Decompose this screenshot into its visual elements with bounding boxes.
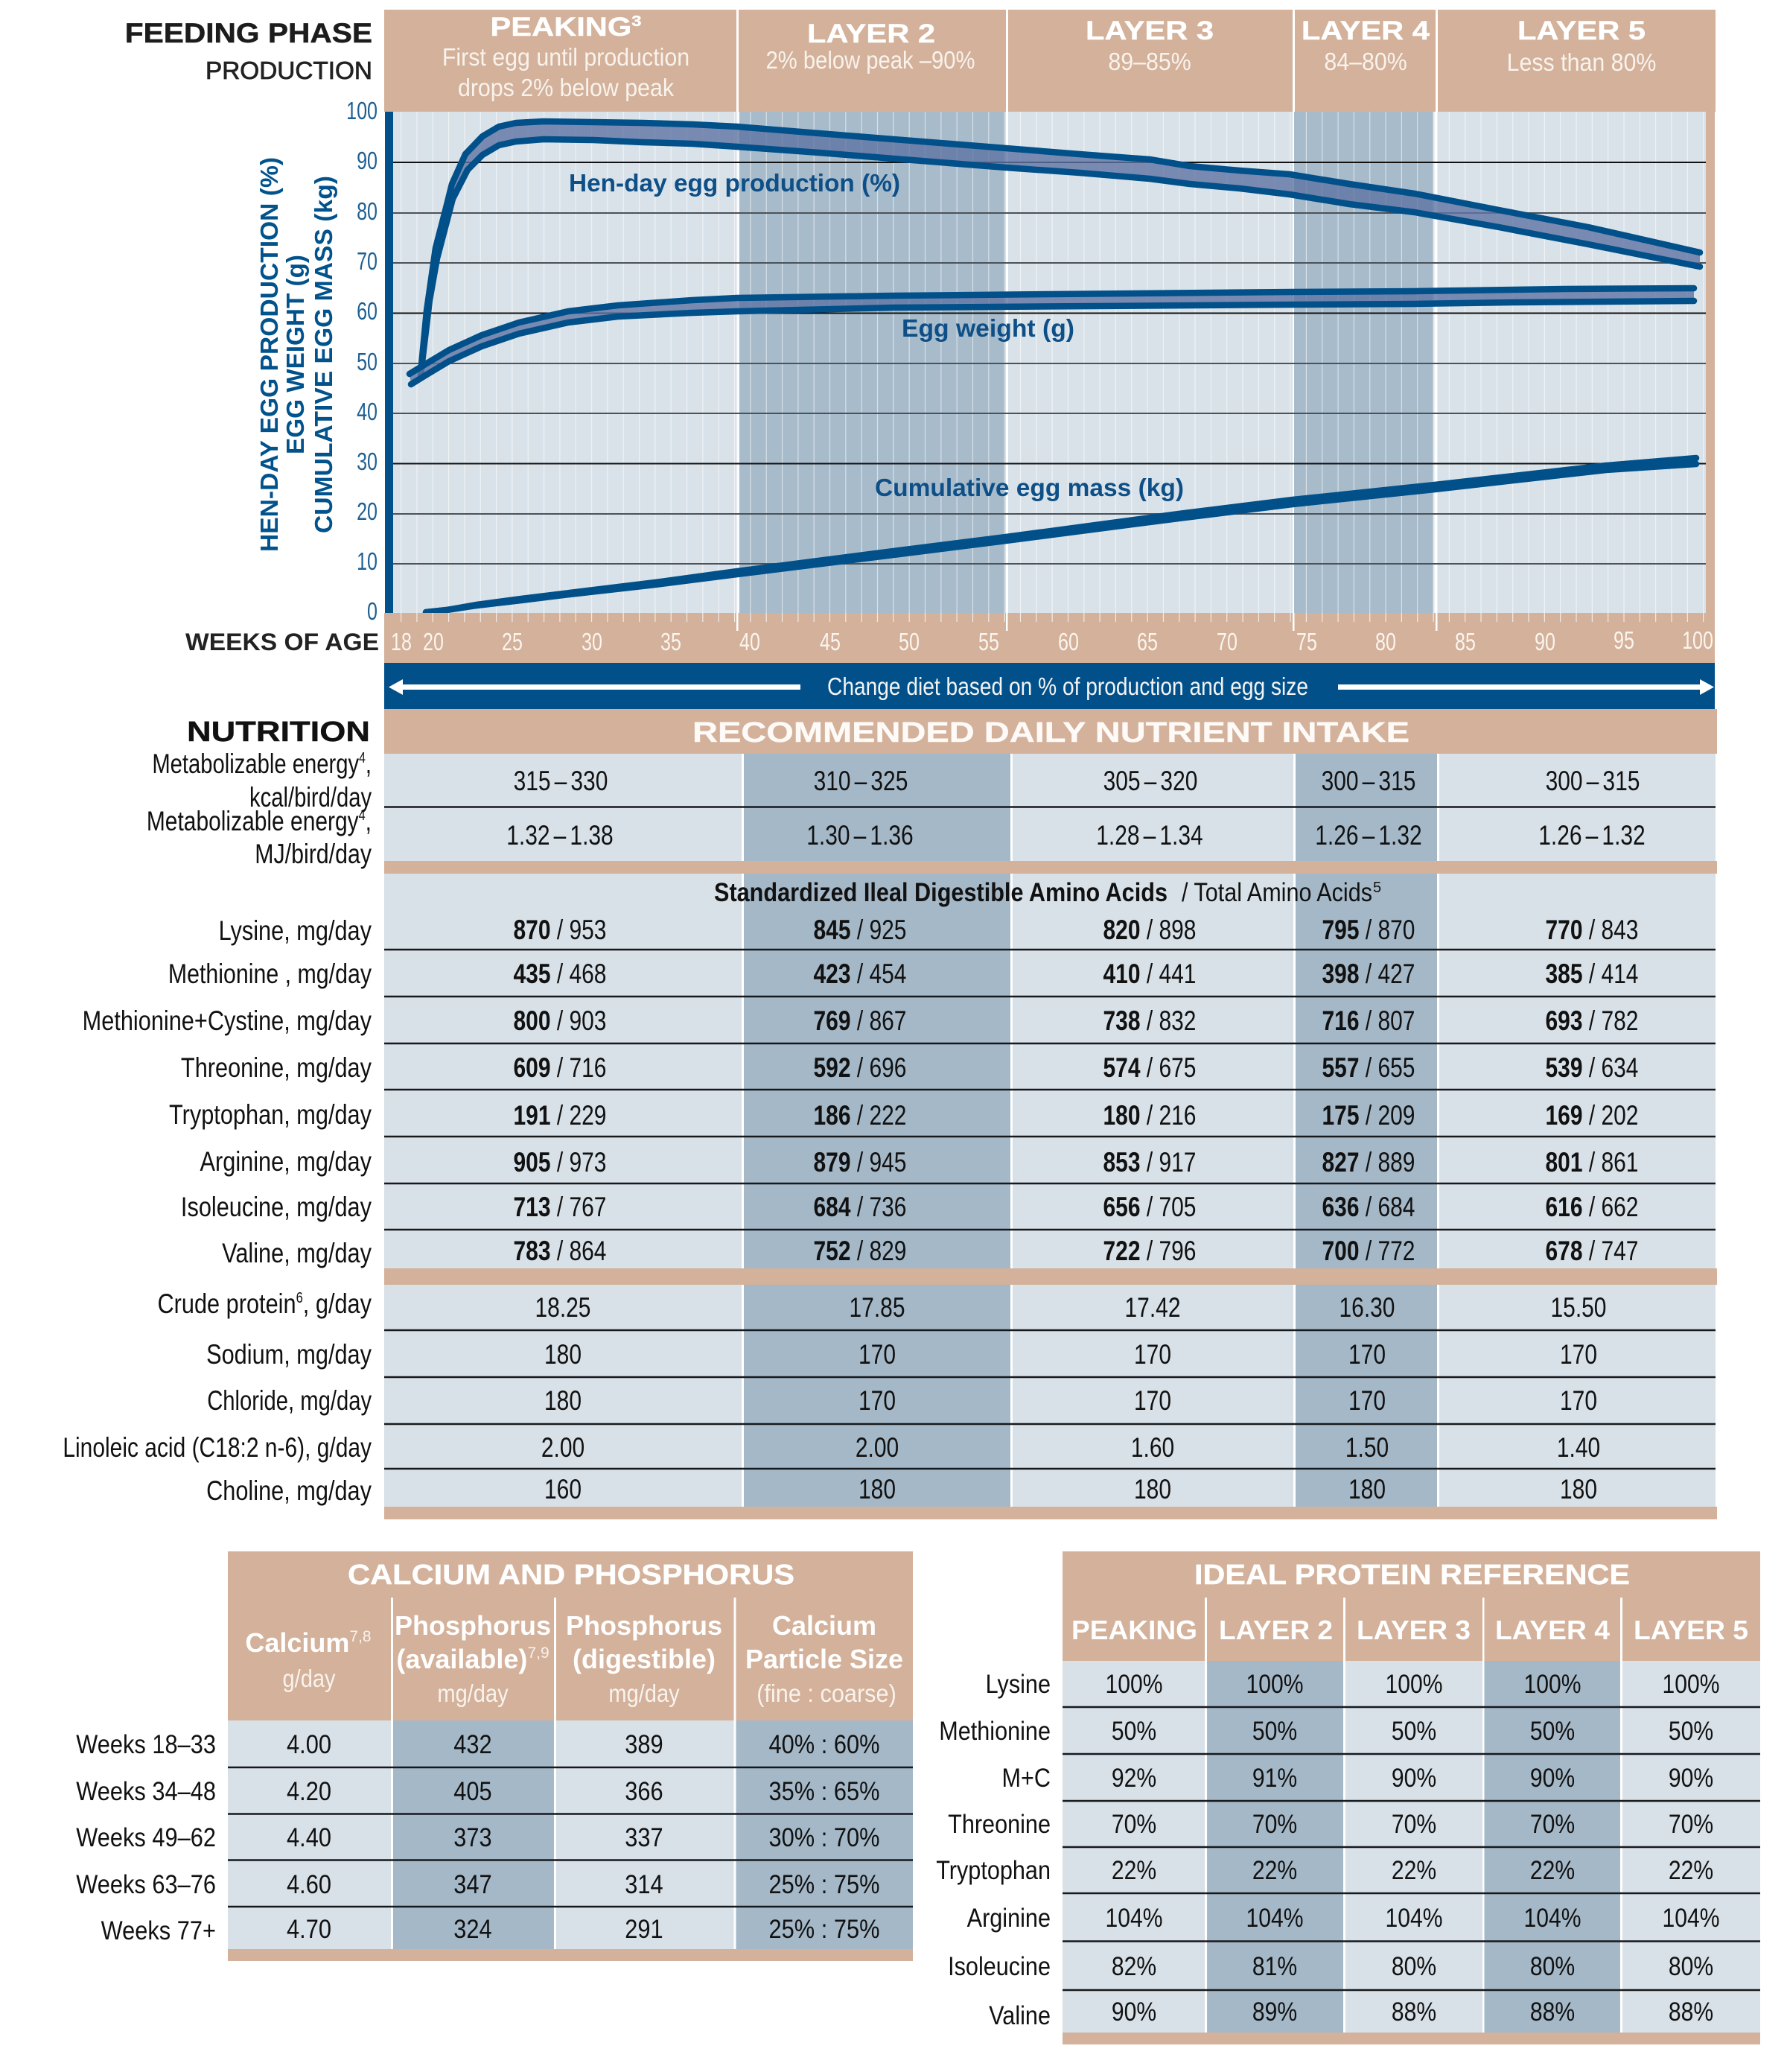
row: valine: 88% [1392, 1997, 1436, 2027]
y axis tick labels: 10 [357, 548, 378, 576]
row: weeks 77+: 25% : 75% [769, 1914, 879, 1943]
phase: peaking: PEAKING [491, 13, 631, 42]
x axis: weeks of age: 85 [1455, 629, 1476, 656]
row: linoleic acid: 1.40 [1557, 1433, 1600, 1464]
row: crude protein: , g/day [303, 1288, 372, 1320]
row: sodium: 180 [544, 1340, 582, 1370]
row: metabolizable energy kcal: Metabolizable energy [152, 749, 359, 780]
title: ideal protein reference: IDEAL PROTEIN REFERENCE [1194, 1560, 1630, 1591]
curve: hen-day egg production [421, 121, 1700, 375]
phase: layer 3: 89–85% [1108, 48, 1191, 75]
y axis titles: EGG WEIGHT (g) [281, 255, 309, 454]
row: linoleic acid: 1.50 [1345, 1433, 1389, 1464]
row: threonine: 609 / 716 [514, 1053, 606, 1084]
row: methionine+cystine: 800 / 903 [514, 1006, 606, 1037]
column header: calcium particle size: Calcium [772, 1610, 876, 1641]
row: choline: 160 [544, 1475, 582, 1505]
x axis: weeks of age: 60 [1058, 629, 1079, 656]
row: lysine: 100% [1663, 1669, 1719, 1699]
row: linoleic acid: 1.60 [1131, 1433, 1174, 1464]
phase: layer 5: Less than 80% [1507, 48, 1656, 76]
row: valine: 88% [1669, 1997, 1713, 2027]
row: linoleic acid: Linoleic acid (C18:2 n-6), g/day [63, 1433, 372, 1464]
row: arginine [967, 1903, 1719, 1933]
row: methionine: 410 / 441 [1103, 959, 1196, 990]
column header: phosphorus digestible: mg/day [608, 1679, 680, 1707]
row: lysine: Lysine [986, 1669, 1051, 1698]
row: threonine: 557 / 655 [1322, 1053, 1415, 1084]
row: weeks 49-62: 30% : 70% [769, 1822, 879, 1852]
x axis: weeks of age: 50 [899, 629, 920, 656]
row: valine: 88% [1530, 1997, 1575, 2027]
row: arginine: 905 / 973 [514, 1148, 606, 1178]
row: weeks 34-48: 405 [453, 1776, 492, 1805]
row: tryptophan [169, 1099, 1638, 1131]
row: tryptophan: 180 / 216 [1103, 1101, 1196, 1131]
banner: change diet: Change diet based on % of production and egg size [827, 673, 1308, 700]
row: arginine: 104% [1663, 1903, 1719, 1933]
phase: peaking: 3 [631, 13, 641, 30]
row: choline: 180 [1134, 1475, 1171, 1505]
row: valine: Valine, mg/day [222, 1238, 372, 1269]
row: metabolizable energy MJ: 1.26 – 1.32 [1315, 821, 1422, 851]
row: metabolizable energy kcal [152, 749, 1640, 813]
row: weeks 63-76: 347 [453, 1869, 492, 1898]
x axis: weeks of age: 95 [1614, 627, 1634, 655]
row: lysine [986, 1669, 1719, 1699]
panel: feeding phase header [384, 10, 1716, 112]
row: valine: 700 / 772 [1322, 1236, 1415, 1267]
row: isoleucine: 81% [1252, 1951, 1297, 1981]
row: methionine: 50% [1530, 1716, 1575, 1746]
y axis tick labels: 100 [346, 98, 378, 125]
row: threonine: 574 / 675 [1103, 1053, 1196, 1084]
row: chloride: 170 [1348, 1386, 1386, 1417]
heading: nutrition: NUTRITION [187, 716, 370, 748]
row: metabolizable energy MJ: , [366, 807, 372, 837]
phase: layer 2: LAYER 2 [807, 19, 935, 48]
row: metabolizable energy kcal: 300 – 315 [1322, 766, 1415, 797]
row: weeks 63-76: 4.60 [287, 1869, 331, 1898]
phase: layer 5 [1507, 16, 1656, 76]
column headers: LAYER 4 [1495, 1615, 1610, 1645]
row: M+C: 91% [1252, 1763, 1297, 1793]
row: linoleic acid: 2.00 [541, 1433, 584, 1464]
row: threonine: 592 / 696 [814, 1053, 906, 1084]
row: weeks 63-76: 314 [625, 1869, 663, 1898]
row: methionine: 435 / 468 [514, 959, 606, 990]
row: lysine: 820 / 898 [1103, 915, 1196, 946]
row: threonine: 70% [1392, 1809, 1436, 1839]
column header: calcium: g/day [283, 1665, 336, 1692]
row: threonine: 70% [1530, 1809, 1575, 1839]
row: crude protein: 17.85 [850, 1293, 905, 1323]
x axis: weeks of age: 40 [739, 629, 760, 656]
row: methionine: 423 / 454 [814, 959, 906, 990]
row: valine [222, 1236, 1638, 1269]
row: arginine: 853 / 917 [1103, 1148, 1196, 1178]
row: crude protein: 18.25 [535, 1293, 590, 1323]
column headers: LAYER 2 [1219, 1615, 1333, 1645]
row: M+C: 90% [1530, 1763, 1575, 1793]
row: valine: 722 / 796 [1103, 1236, 1196, 1267]
row: weeks 77+ [101, 1914, 879, 1945]
row: weeks 49-62 [76, 1822, 879, 1852]
row: crude protein: 6 [296, 1289, 303, 1306]
row: weeks 49-62: 373 [453, 1822, 492, 1852]
row: crude protein: 17.42 [1125, 1293, 1180, 1323]
panel: ideal protein reference [936, 1551, 1760, 2044]
y axis titles: CUMULATIVE EGG MASS (kg) [310, 176, 337, 533]
row: choline: 180 [1348, 1475, 1386, 1505]
column headers: LAYER 5 [1634, 1615, 1748, 1645]
y axis titles [255, 157, 337, 552]
row: tryptophan: 22% [1252, 1855, 1297, 1885]
phase: layer 2: 2% below peak –90% [766, 46, 975, 74]
row: threonine: 70% [1112, 1809, 1156, 1839]
row: weeks 18-33 [76, 1729, 879, 1758]
y axis tick labels: 20 [357, 498, 378, 526]
row: isoleucine: 684 / 736 [814, 1192, 906, 1223]
column header: phosphorus available [395, 1610, 551, 1707]
x axis: weeks of age: 35 [660, 629, 681, 656]
row: isoleucine: Isoleucine [948, 1951, 1051, 1980]
row: sodium: 170 [1560, 1340, 1597, 1370]
x axis: weeks of age [384, 613, 1715, 663]
row: threonine: Threonine, mg/day [181, 1052, 372, 1084]
row: weeks 77+: Weeks 77+ [101, 1916, 216, 1945]
row: lysine: 100% [1106, 1669, 1162, 1699]
y axis tick labels: 0 [367, 598, 378, 626]
x axis: weeks of age: 100 [1682, 627, 1713, 655]
x axis: weeks of age: 75 [1296, 629, 1317, 656]
row: weeks 34-48: 4.20 [287, 1776, 331, 1805]
row: weeks 18-33: 389 [625, 1729, 663, 1758]
row: tryptophan: 22% [1530, 1855, 1575, 1885]
x axis: weeks of age: 45 [820, 629, 841, 656]
row: weeks 18-33: 4.00 [287, 1729, 331, 1758]
row: sodium: 170 [859, 1340, 896, 1370]
row: methionine: Methionine [939, 1716, 1051, 1745]
row: isoleucine: 616 / 662 [1546, 1192, 1638, 1223]
row: tryptophan: 22% [1112, 1855, 1156, 1885]
row: weeks 77+: 291 [625, 1914, 663, 1943]
row: sodium [206, 1339, 1597, 1370]
heading: weeks of age: WEEKS OF AGE [185, 629, 379, 655]
row: weeks 49-62: Weeks 49–62 [76, 1822, 216, 1852]
row: lysine: 100% [1386, 1669, 1442, 1699]
row: isoleucine: 80% [1530, 1951, 1575, 1981]
x axis: weeks of age: 70 [1217, 629, 1237, 656]
row: chloride: 170 [859, 1386, 896, 1417]
column header: calcium: 7,8 [349, 1628, 372, 1645]
row: lysine: 770 / 843 [1546, 915, 1638, 946]
x axis: weeks of age: 30 [582, 629, 602, 656]
phase: layer 3 [1086, 16, 1214, 75]
row: tryptophan: 175 / 209 [1322, 1101, 1415, 1131]
row: threonine [181, 1052, 1638, 1084]
row: weeks 77+: 324 [453, 1914, 492, 1943]
row: metabolizable energy MJ: 1.32 – 1.38 [506, 821, 614, 851]
y axis tick labels: 40 [357, 398, 378, 426]
row: arginine: Arginine, mg/day [200, 1146, 372, 1178]
row: weeks 49-62: 337 [625, 1822, 663, 1852]
y axis tick labels: 80 [357, 198, 378, 226]
row: metabolizable energy MJ: 1.28 – 1.34 [1096, 821, 1203, 851]
column header: phosphorus digestible [566, 1610, 722, 1707]
row: metabolizable energy kcal: kcal/bird/day [249, 783, 372, 813]
row: metabolizable energy kcal: 4 [359, 749, 366, 766]
row: metabolizable energy kcal: 310 – 325 [814, 766, 908, 797]
row: M+C: M+C [1002, 1763, 1051, 1792]
row: lysine: 100% [1246, 1669, 1303, 1699]
row: methionine: 50% [1392, 1716, 1436, 1746]
row: arginine [200, 1146, 1638, 1178]
phase: layer 4: 84–80% [1324, 48, 1407, 75]
row: crude protein: 16.30 [1340, 1293, 1395, 1323]
row: methionine: Methionine , mg/day [168, 959, 372, 990]
row: choline: Choline, mg/day [206, 1475, 372, 1507]
column header: calcium particle size: Particle Size [745, 1644, 903, 1674]
row: choline [206, 1475, 1597, 1507]
row: isoleucine: 713 / 767 [514, 1192, 606, 1223]
phase: layer 3: LAYER 3 [1086, 16, 1214, 45]
y axis tick labels: 30 [357, 448, 378, 476]
row: sodium: 170 [1348, 1340, 1386, 1370]
row: valine: 783 / 864 [514, 1236, 606, 1267]
row: methionine+cystine: 693 / 782 [1546, 1006, 1638, 1037]
row: lysine: 870 / 953 [514, 915, 606, 946]
row: valine [989, 1997, 1713, 2030]
row: M+C: 92% [1112, 1763, 1156, 1793]
row: metabolizable energy MJ [147, 807, 1646, 870]
row: weeks 63-76 [76, 1869, 879, 1898]
row: weeks 63-76: Weeks 63–76 [76, 1869, 216, 1898]
row: lysine: Lysine, mg/day [219, 915, 372, 947]
row: tryptophan: 191 / 229 [514, 1101, 606, 1131]
column header: calcium particle size: (fine : coarse) [756, 1679, 896, 1707]
phase: layer 2 [766, 19, 975, 74]
row: threonine: 70% [1669, 1809, 1713, 1839]
y axis tick labels: 70 [357, 248, 378, 276]
row: valine: 89% [1252, 1997, 1297, 2027]
row: isoleucine: Isoleucine, mg/day [181, 1192, 372, 1223]
row: metabolizable energy kcal: 300 – 315 [1546, 766, 1640, 797]
row: arginine: 104% [1386, 1903, 1442, 1933]
column header: phosphorus available: Phosphorus [395, 1610, 551, 1641]
heading: production: PRODUCTION [206, 57, 372, 85]
row: isoleucine [948, 1951, 1713, 1981]
row: threonine: 539 / 634 [1546, 1053, 1638, 1084]
row: weeks 34-48: Weeks 34–48 [76, 1776, 216, 1805]
row: methionine: 50% [1112, 1716, 1156, 1746]
row: methionine+cystine: 716 / 807 [1322, 1006, 1415, 1037]
row: weeks 77+: 4.70 [287, 1914, 331, 1943]
row: isoleucine: 656 / 705 [1103, 1192, 1196, 1223]
label: hen-day egg production: Hen-day egg production (%) [569, 169, 900, 197]
y axis tick labels: 90 [357, 147, 378, 175]
row: tryptophan: 186 / 222 [814, 1101, 906, 1131]
y axis titles: HEN-DAY EGG PRODUCTION (%) [255, 157, 283, 552]
row: sodium: 170 [1134, 1340, 1171, 1370]
column header: phosphorus available: 7,9 [527, 1644, 550, 1662]
column header: phosphorus available: (available) [396, 1644, 527, 1674]
row: metabolizable energy kcal: 305 – 320 [1103, 766, 1197, 797]
row: arginine: 879 / 945 [814, 1148, 906, 1178]
row: methionine+cystine: 738 / 832 [1103, 1006, 1196, 1037]
row: weeks 34-48 [76, 1776, 879, 1805]
row: metabolizable energy MJ: 1.26 – 1.32 [1538, 821, 1646, 851]
row: tryptophan [936, 1855, 1713, 1885]
row: weeks 49-62: 4.40 [287, 1822, 331, 1852]
row: valine: Valine [989, 2001, 1051, 2030]
x axis: weeks of age: 18 [391, 629, 412, 656]
row: chloride [207, 1386, 1597, 1417]
row: metabolizable energy MJ: 1.30 – 1.36 [806, 821, 914, 851]
row: weeks 34-48: 35% : 65% [769, 1776, 879, 1805]
y axis tick labels: 50 [357, 349, 378, 376]
title: calcium and phosphorus: CALCIUM AND PHOSPHORUS [348, 1560, 794, 1591]
row: isoleucine [181, 1192, 1638, 1223]
row: tryptophan: 169 / 202 [1546, 1101, 1638, 1131]
phase: layer 4 [1302, 16, 1430, 75]
y axis tick labels [346, 98, 378, 626]
curve: egg weight [410, 288, 1694, 384]
row: isoleucine: 80% [1669, 1951, 1713, 1981]
column header: phosphorus digestible: (digestible) [573, 1644, 716, 1674]
row: lysine: 795 / 870 [1322, 915, 1415, 946]
row: linoleic acid [63, 1433, 1600, 1464]
row: methionine: 50% [1252, 1716, 1297, 1746]
row: threonine: 70% [1252, 1809, 1297, 1839]
row: threonine: Threonine [948, 1809, 1051, 1838]
row: isoleucine: 636 / 684 [1322, 1192, 1415, 1223]
row: weeks 63-76: 25% : 75% [769, 1869, 879, 1898]
row: isoleucine: 82% [1112, 1951, 1156, 1981]
row: arginine: 801 / 861 [1546, 1148, 1638, 1178]
row: arginine: Arginine [967, 1903, 1051, 1932]
phase: peaking [442, 13, 689, 101]
row: chloride: 170 [1560, 1386, 1597, 1417]
curve: cumulative egg mass [426, 458, 1696, 612]
row: M+C: 90% [1392, 1763, 1436, 1793]
column header: phosphorus digestible: Phosphorus [566, 1610, 722, 1641]
row: weeks 34-48: 366 [625, 1776, 663, 1805]
column headers: LAYER 3 [1357, 1615, 1471, 1645]
subheading: amino acids: 5 [1373, 880, 1381, 896]
row: lysine [219, 915, 1638, 947]
column header: calcium: Calcium [245, 1627, 349, 1658]
row: tryptophan: 22% [1392, 1855, 1436, 1885]
row: tryptophan: Tryptophan [936, 1855, 1051, 1884]
column headers [1071, 1615, 1748, 1645]
phase: peaking: First egg until production [442, 43, 689, 71]
row: sodium: Sodium, mg/day [206, 1339, 372, 1370]
row: crude protein [157, 1288, 1606, 1323]
row: metabolizable energy MJ: 4 [359, 807, 366, 823]
row: metabolizable energy kcal: 315 – 330 [514, 766, 608, 797]
row: choline: 180 [859, 1475, 896, 1505]
heading: feeding phase: FEEDING PHASE [125, 19, 372, 49]
row: metabolizable energy MJ: Metabolizable energy [147, 807, 359, 837]
row: chloride: 180 [544, 1386, 582, 1417]
label: egg weight: Egg weight (g) [902, 314, 1074, 342]
x axis: weeks of age: 55 [978, 629, 999, 656]
phase: layer 4: LAYER 4 [1302, 16, 1430, 45]
chart: production curves [385, 112, 1715, 613]
panel: calcium and phosphorus [76, 1551, 913, 1961]
row: M+C [1002, 1763, 1713, 1793]
row: chloride: Chloride, mg/day [207, 1386, 372, 1417]
x axis: weeks of age: 25 [502, 629, 523, 656]
x axis: weeks of age: 65 [1137, 629, 1158, 656]
row: tryptophan: Tryptophan, mg/day [169, 1099, 372, 1131]
row: crude protein: 15.50 [1551, 1293, 1606, 1323]
row: weeks 18-33: 40% : 60% [769, 1729, 879, 1758]
row: chloride: 170 [1134, 1386, 1171, 1417]
row: metabolizable energy MJ: MJ/bird/day [255, 839, 372, 870]
column header: calcium [245, 1627, 372, 1692]
x axis: weeks of age: 80 [1375, 629, 1396, 656]
row: arginine: 827 / 889 [1322, 1148, 1415, 1178]
x axis: weeks of age: 90 [1535, 629, 1555, 656]
row: valine: 752 / 829 [814, 1236, 906, 1267]
row: lysine: 100% [1524, 1669, 1581, 1699]
subheading: amino acids: / Total Amino Acids [1182, 878, 1372, 907]
row: weeks 18-33: 432 [453, 1729, 492, 1758]
row: methionine+cystine: Methionine+Cystine, mg/day [83, 1005, 372, 1037]
row: arginine: 104% [1524, 1903, 1581, 1933]
row: metabolizable energy kcal: , [366, 749, 372, 780]
phase: peaking: drops 2% below peak [458, 74, 674, 101]
row: choline: 180 [1560, 1475, 1597, 1505]
banner: change diet [384, 663, 1715, 709]
row: valine: 90% [1112, 1997, 1156, 2027]
row: methionine+cystine [83, 1005, 1638, 1037]
row: isoleucine: 80% [1392, 1951, 1436, 1981]
row: threonine [948, 1809, 1713, 1839]
row: linoleic acid: 2.00 [856, 1433, 899, 1464]
row: weeks 18-33: Weeks 18–33 [76, 1729, 216, 1758]
x axis: weeks of age: 20 [423, 629, 444, 656]
row: lysine: 845 / 925 [814, 915, 906, 946]
phase: layer 5: LAYER 5 [1517, 16, 1646, 45]
column headers: PEAKING [1071, 1615, 1197, 1645]
label: cumulative egg mass: Cumulative egg mass (kg) [875, 474, 1184, 501]
arrow: right [1338, 679, 1714, 695]
column header: phosphorus available: mg/day [437, 1679, 509, 1707]
row: crude protein: Crude protein [157, 1288, 296, 1320]
column header: calcium particle size [745, 1610, 903, 1707]
row: arginine: 104% [1246, 1903, 1303, 1933]
subheading: amino acids: Standardized Ileal Digestible Amino Acids [714, 878, 1168, 907]
y axis tick labels: 60 [357, 298, 378, 325]
row: methionine+cystine: 769 / 867 [814, 1006, 906, 1037]
row: valine: 678 / 747 [1546, 1236, 1638, 1267]
title: recommended daily nutrient intake: RECOMMENDED DAILY NUTRIENT INTAKE [692, 717, 1409, 749]
panel: recommended daily nutrient intake [63, 709, 1717, 1519]
row: arginine: 104% [1106, 1903, 1162, 1933]
row: methionine: 398 / 427 [1322, 959, 1415, 990]
row: methionine [939, 1716, 1713, 1746]
row: methionine: 50% [1669, 1716, 1713, 1746]
row: methionine [168, 959, 1638, 990]
row: M+C: 90% [1669, 1763, 1713, 1793]
row: tryptophan: 22% [1669, 1855, 1713, 1885]
row: methionine: 385 / 414 [1546, 959, 1638, 990]
arrow: left [389, 679, 800, 695]
